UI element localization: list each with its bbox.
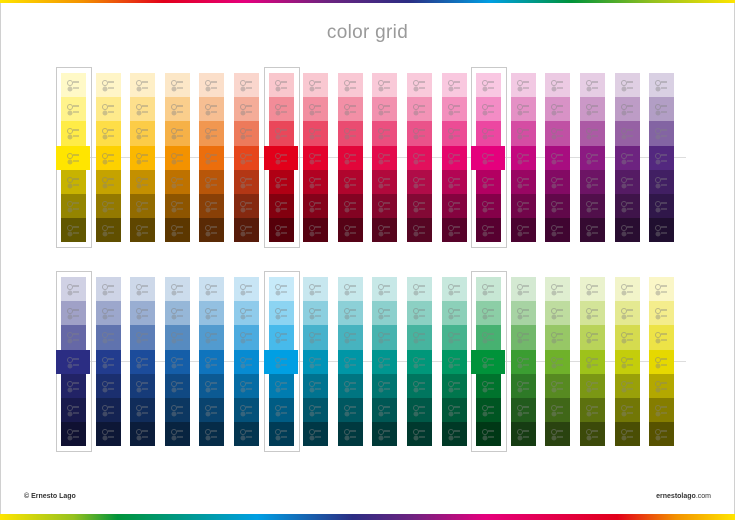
credit: © Ernesto Lago <box>24 493 76 500</box>
column 1 yellow <box>56 73 90 242</box>
column 6 <box>234 277 259 446</box>
title: color grid <box>327 22 408 43</box>
column 18 <box>649 277 674 446</box>
panel: warm grid <box>56 67 686 248</box>
column 8 <box>303 277 328 446</box>
rainbow bar top <box>0 0 735 3</box>
column 7 red <box>264 73 298 242</box>
column 5 <box>199 277 224 446</box>
column 2 <box>96 73 121 242</box>
column 15 <box>545 277 570 446</box>
website: ernestolago.com <box>656 493 711 500</box>
column 18 <box>649 73 674 242</box>
column 13 magenta <box>471 73 505 242</box>
column 16 <box>580 73 605 242</box>
frame: green key column <box>471 271 507 452</box>
column 5 <box>199 73 224 242</box>
frame: navy key column <box>56 271 92 452</box>
column 1 navy <box>56 277 90 446</box>
column 7 cyan <box>264 277 298 446</box>
column 3 <box>130 73 155 242</box>
frame: magenta key column <box>471 67 507 248</box>
column 10 <box>372 277 397 446</box>
column 2 <box>96 277 121 446</box>
column 14 <box>511 277 536 446</box>
column 12 <box>442 73 467 242</box>
column 12 <box>442 277 467 446</box>
column 17 <box>615 73 640 242</box>
column 9 <box>338 277 363 446</box>
rainbow bar bottom <box>0 514 735 520</box>
column 14 <box>511 73 536 242</box>
column 11 <box>407 277 432 446</box>
column 16 <box>580 277 605 446</box>
column 8 <box>303 73 328 242</box>
column 3 <box>130 277 155 446</box>
column 4 <box>165 73 190 242</box>
panel: cool grid <box>56 271 686 452</box>
column 15 <box>545 73 570 242</box>
column 9 <box>338 73 363 242</box>
column 10 <box>372 73 397 242</box>
column 6 <box>234 73 259 242</box>
column 13 green <box>471 277 505 446</box>
column 4 <box>165 277 190 446</box>
frame: cyan key column <box>264 271 300 452</box>
column 11 <box>407 73 432 242</box>
frame: yellow key column <box>56 67 92 248</box>
frame: red key column <box>264 67 300 248</box>
column 17 <box>615 277 640 446</box>
